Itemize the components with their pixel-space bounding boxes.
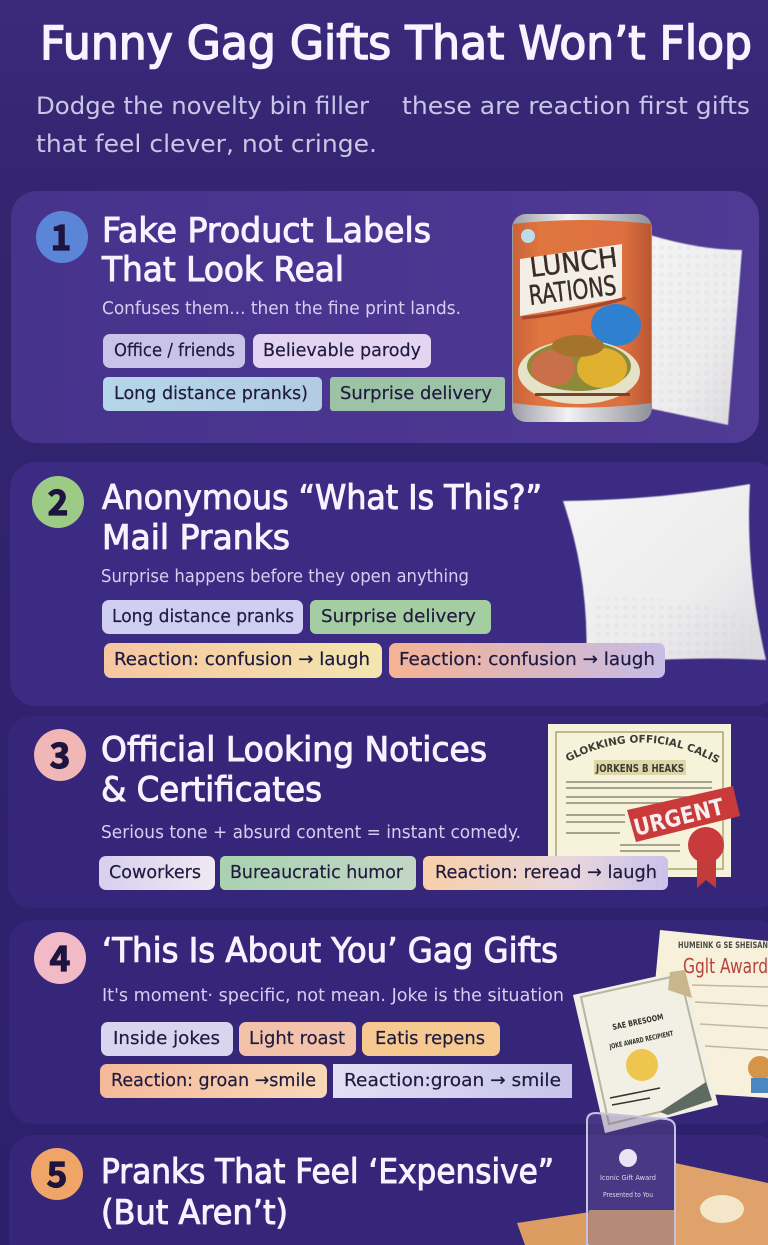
heading 1: That Look Real [101, 250, 344, 290]
icon: glass trophy: Iconic Gift Award [600, 1174, 656, 1182]
chips 3 [99, 856, 668, 890]
number badge 3 [34, 728, 86, 781]
icon: gag certificate: SAE BRESOOM [612, 1012, 664, 1032]
heading 3 [101, 730, 487, 810]
description 3: Serious tone + absurd content = instant comedy. [101, 823, 521, 843]
chips 3: Coworkers [109, 862, 201, 883]
icon: gift box [517, 1163, 768, 1245]
icon: gag certificate [573, 970, 718, 1133]
chips 3: Bureaucratic humor [230, 862, 404, 883]
heading 1 [101, 211, 431, 290]
chips 2: Feaction: confusion → laugh [399, 649, 655, 670]
icon: certificate with urgent stamp: JORKENS B HEAKS [595, 762, 684, 775]
number badge 1: 1 [51, 210, 71, 261]
subtitle: that feel clever, not cringe. [36, 130, 377, 158]
description 2: Surprise happens before they open anything [101, 567, 469, 587]
panel: anonymous mail pranks [10, 462, 768, 706]
heading 5 [101, 1152, 554, 1233]
chips 1: Long distance pranks) [114, 383, 308, 404]
chips 1: Office / friends [114, 340, 235, 361]
icon: lunch rations can: RATIONS [527, 270, 618, 312]
number badge 2 [32, 475, 84, 528]
number badge 4: 4 [50, 931, 70, 982]
heading 5: Pranks That Feel ‘Expensive” [101, 1152, 554, 1192]
panel: about you gag gifts [9, 920, 768, 1133]
number badge 5 [31, 1147, 83, 1200]
icon: glass trophy [587, 1113, 675, 1245]
panel: fake product labels [11, 191, 759, 443]
chips 1: Believable parody [263, 340, 421, 361]
number badge 1 [36, 210, 88, 263]
heading 3: & Certificates [101, 770, 322, 810]
title: Funny Gag Gifts That Won’t Flop [40, 16, 752, 70]
panel: official notices [8, 716, 768, 908]
icon: gag certificate: JOKE AWARD RECIPIENT [608, 1030, 674, 1051]
chips 2: Long distance pranks [112, 606, 294, 627]
chips 2 [102, 600, 665, 678]
number badge 5: 5 [47, 1147, 67, 1198]
heading 3: Official Looking Notices [101, 730, 487, 770]
icon: lunch rations can [512, 214, 652, 422]
subtitle [36, 92, 750, 158]
heading 5: (But Aren’t) [101, 1193, 288, 1233]
icon: certificate with urgent stamp [548, 724, 740, 888]
chips 4: Reaction: groan →smile [111, 1070, 316, 1091]
chips 4 [100, 1022, 572, 1098]
icon: certificate with urgent stamp: GLOKKING OFFICIAL CALIS [566, 734, 720, 762]
chips 1 [103, 334, 505, 411]
number badge 3: 3 [50, 728, 70, 779]
icon: gift award certificate [645, 930, 768, 1098]
icon: certificate with urgent stamp: URGENT [631, 794, 727, 842]
chips 4: Eatis repens [375, 1028, 485, 1049]
description 1: Confuses them... then the fine print lands. [102, 299, 461, 319]
subtitle: Dodge the novelty bin filler [36, 92, 369, 120]
subtitle: these are reaction first gifts [402, 92, 750, 120]
heading 2: Anonymous “What Is This?” [102, 478, 542, 518]
heading 4: ‘This Is About You’ Gag Gifts [102, 931, 558, 971]
heading 2 [102, 478, 542, 558]
icon: bubble mailer behind can [648, 235, 742, 425]
icon: padded white mailer [563, 484, 766, 666]
panel: expensive pranks [9, 1113, 768, 1245]
description 4: It's moment· specific, not mean. Joke is the situation [102, 986, 564, 1006]
icon: glass trophy: Presented to You [603, 1191, 653, 1199]
heading 1: Fake Product Labels [102, 211, 431, 251]
chips 2: Surprise delivery [321, 606, 476, 627]
chips 2: Reaction: confusion → laugh [114, 649, 370, 670]
chips 4: Inside jokes [113, 1028, 220, 1049]
chips 4: Light roast [249, 1028, 345, 1049]
number badge 2: 2 [48, 475, 68, 526]
chips 3: Reaction: reread → laugh [435, 862, 657, 883]
heading 2: Mail Pranks [102, 518, 290, 558]
number badge 4 [34, 931, 86, 984]
chips 4: Reaction:groan → smile [344, 1070, 561, 1091]
chips 1: Surprise delivery [340, 383, 492, 404]
icon: lunch rations can: LUNCH [528, 242, 619, 284]
